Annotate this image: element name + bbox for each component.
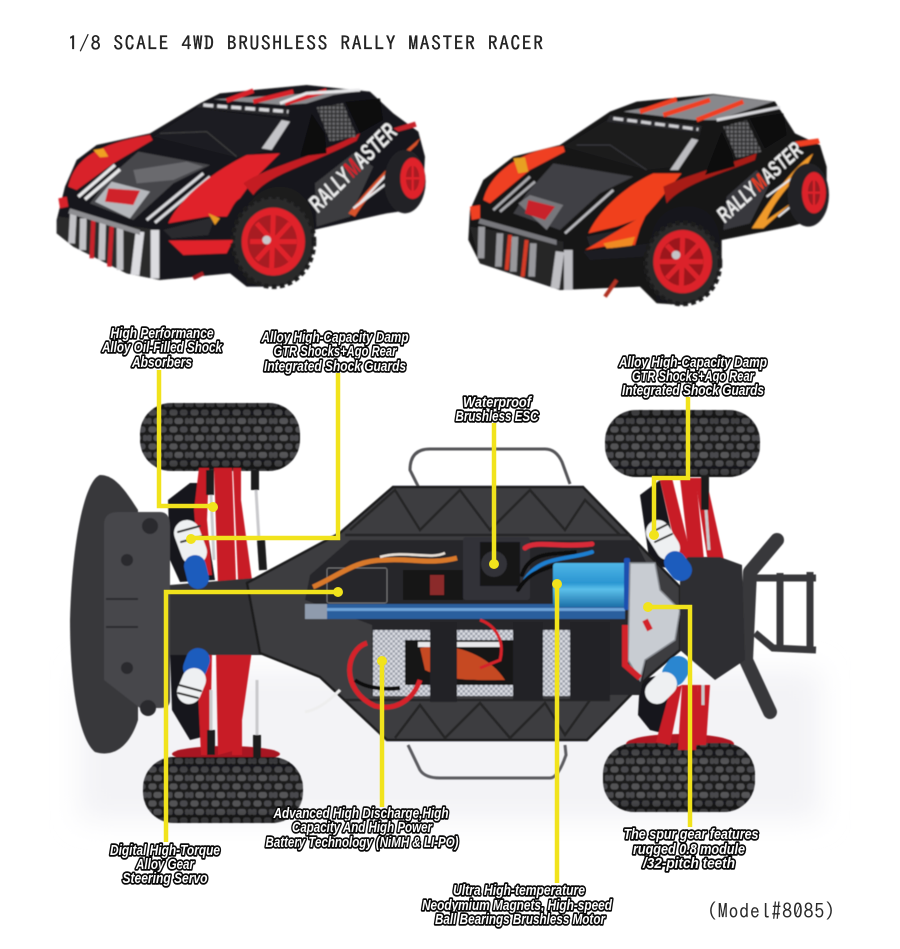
label: high performance shock absorbers: Alloy Oil-Filled Shock (101, 339, 223, 356)
suspension arms: top left (194, 468, 252, 585)
shock: bottom right (657, 668, 678, 692)
label: battery technology: Capacity And High Power (292, 819, 433, 836)
tyre: top left (140, 403, 300, 471)
servo wires (313, 558, 457, 587)
callout line: integrated shock guards right (649, 397, 688, 540)
label: spur gear: /32-pitch teeth (642, 855, 735, 872)
label: battery technology: Battery Technology (NiMH & LI-PO) (266, 834, 458, 851)
brushless ESC (463, 537, 530, 600)
suspension arms: bottom right (656, 685, 710, 750)
receiver (403, 570, 463, 600)
label: high performance shock absorbers: High Performance (110, 325, 214, 342)
label: spur gear: rugged 0.8 module (633, 841, 745, 858)
red motor mount (625, 620, 650, 678)
photo: orange rally car (468, 94, 829, 305)
label: GTR shocks right: Integrated Shock Guards (622, 382, 764, 399)
label: motor: Ball Bearings Brushless Motor (435, 911, 606, 928)
title: 1/8 SCALE 4WD BRUSHLESS RALLY MASTER RACER (68, 33, 543, 53)
label: GTR shocks left: GTR Shocks+Ago Rear (274, 343, 397, 360)
callout line: motor (552, 579, 562, 883)
brushless motor (553, 558, 630, 610)
photo: red rally car: RALLYMASTER (303, 118, 403, 218)
chassis ribs (345, 490, 630, 738)
model number: (Model#8085) (707, 901, 835, 921)
label: steering servo: Digital High-Torque (110, 842, 220, 859)
label: GTR shocks right: GTR Shocks+Ago Rear (632, 368, 755, 385)
label: steering servo: Steering Servo (122, 870, 208, 887)
front bulkhead (170, 578, 262, 655)
rear bumper frame (746, 540, 816, 712)
label: spur gear (624, 826, 758, 872)
balance lead (305, 690, 340, 712)
label: motor (422, 882, 613, 928)
chassis cavity (305, 540, 660, 695)
right bulkhead (680, 557, 745, 680)
label: steering servo (110, 842, 220, 887)
body mount: bottom nerf bar (408, 745, 566, 778)
label: battery technology (266, 805, 458, 851)
battery (373, 630, 570, 696)
photo: chassis top view (70, 403, 816, 823)
label: spur gear: The spur gear features (624, 826, 758, 843)
label: GTR shocks right: Alloy High-Capacity Damp (618, 354, 767, 371)
label: waterproof ESC (456, 394, 539, 425)
battery straps (430, 622, 610, 702)
callout line: integrated shock guards left (186, 373, 338, 544)
battery red lead (350, 643, 420, 707)
shock: top left (178, 526, 203, 578)
label: waterproof ESC: Waterproof (463, 394, 533, 411)
clear gear cover (628, 563, 680, 680)
callout line: battery (377, 656, 387, 807)
label: GTR shocks left (261, 329, 408, 375)
callout line: spur gear (643, 602, 690, 827)
callout line: ESC (489, 423, 499, 569)
shock: top right (652, 524, 681, 570)
main chassis plate (247, 487, 680, 740)
label: waterproof ESC: Brushless ESC (456, 408, 539, 425)
callout line: steering servo (166, 587, 343, 842)
label: high performance shock absorbers (101, 325, 223, 371)
label: motor: Neodymium Magnets, High-speed (422, 897, 613, 914)
shock tower plates (168, 483, 215, 582)
callout line: oil-filled shock absorbers (159, 370, 218, 512)
blue drive shaft (305, 604, 625, 619)
label: GTR shocks right (618, 354, 767, 399)
front bumper (70, 475, 170, 753)
steering servo (327, 568, 387, 603)
label: GTR shocks left: Integrated Shock Guards (264, 358, 406, 375)
shock: bottom left (178, 660, 201, 698)
label: motor: Ultra High-temperature (453, 882, 585, 899)
photo: orange rally car: RALLYMASTER (712, 137, 808, 227)
label: battery technology: Advanced High Discharge,High (273, 805, 448, 822)
tyre: top right (605, 410, 760, 477)
label: high performance shock absorbers: Absorbers (131, 354, 192, 371)
photo: red rally car (57, 85, 426, 287)
soft studio backdrop (80, 670, 820, 820)
tyre: bottom right (603, 734, 755, 812)
body mount: top nerf bar (410, 449, 570, 490)
label: GTR shocks left: Alloy High-Capacity Damp (261, 329, 408, 346)
suspension arms: top right (660, 478, 724, 565)
turnbuckles (210, 470, 709, 758)
tyre: bottom left (143, 746, 303, 823)
suspension arms: bottom left (196, 650, 252, 755)
ESC wires (518, 544, 592, 590)
label: steering servo: Alloy Gear (135, 856, 195, 873)
